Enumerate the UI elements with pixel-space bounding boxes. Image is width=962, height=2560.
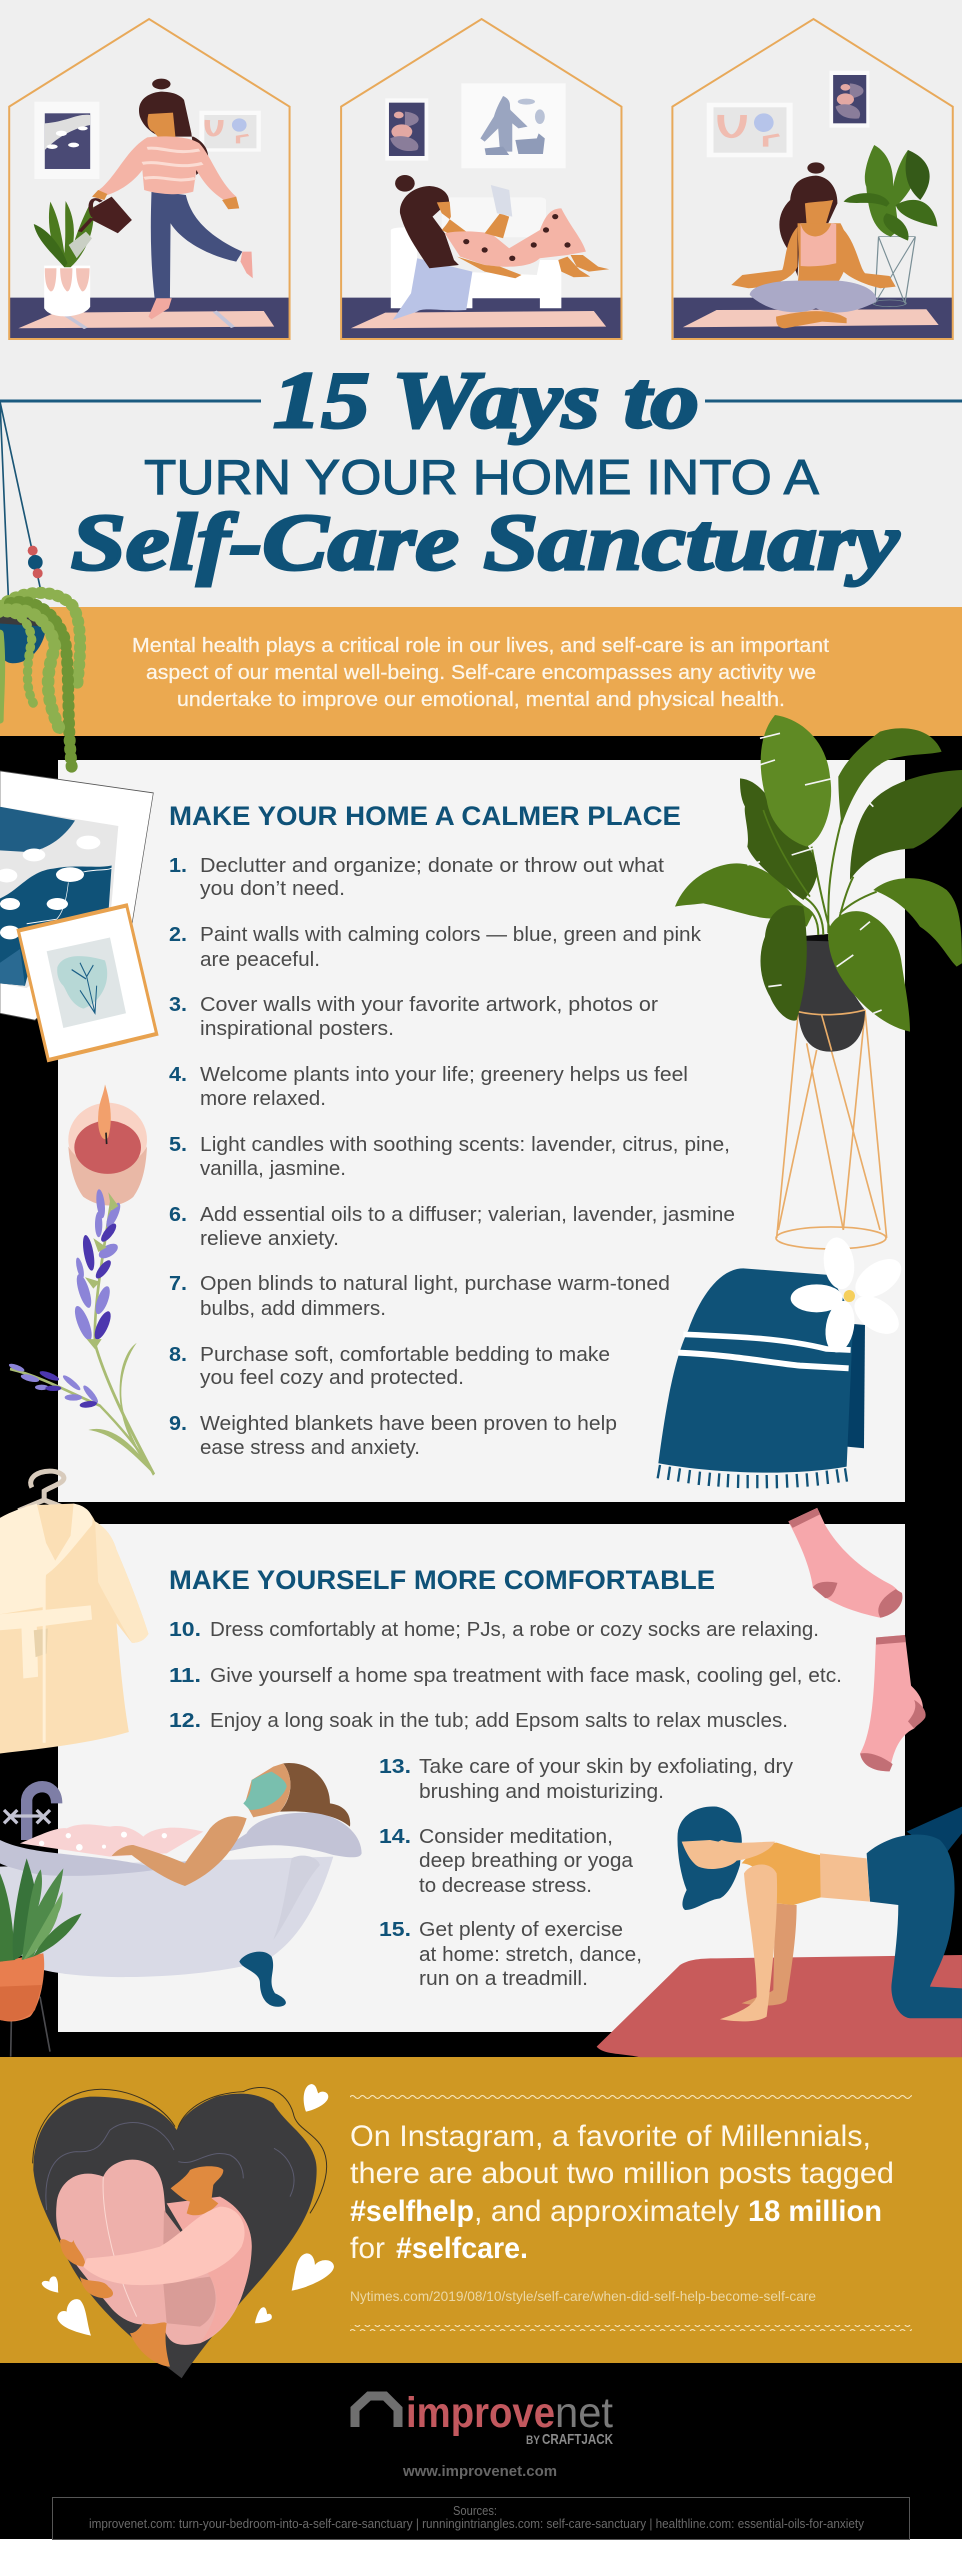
list item 4: Welcome plants into your life; greenery helps us feel: [200, 1063, 688, 1086]
list item 3: 3.: [169, 993, 187, 1016]
list item 14: 14.: [379, 1825, 411, 1848]
illustration: pink socks: [788, 1508, 926, 1771]
sources box: Sources:: [453, 2504, 497, 2518]
list item 14: to decrease stress.: [419, 1874, 592, 1897]
illustration: banana plant in stand: [675, 715, 962, 1249]
list item 3: Cover walls with your favorite artwork, photos or: [200, 993, 658, 1016]
list item 9: [169, 1412, 617, 1459]
sources box: [52, 2498, 910, 2540]
list item 13: 13.: [379, 1755, 411, 1778]
plant stand: [776, 1010, 887, 1249]
list item 2: [169, 923, 702, 971]
list item 15: 15.: [379, 1918, 411, 1941]
house 1: woman watering plant: [9, 79, 290, 339]
stat text: #selfhelp: [350, 2195, 474, 2228]
list item 1: [169, 854, 664, 900]
logo: improvenet by craftjack: improve: [406, 2389, 555, 2437]
logo: improvenet by craftjack: [355, 2389, 613, 2448]
illustration: candle: [68, 1084, 147, 1205]
list item 15: [379, 1918, 642, 1990]
stat text: On Instagram, a favorite of Millennials,: [350, 2120, 871, 2153]
sources box: improvenet.com: turn-your-bedroom-into-a-self-care-sanctuary | runningintriangles.com: self-care-sanctuary | healthline.com: essential-oils-for-anxiety: [89, 2517, 865, 2531]
list item 1: 1.: [169, 854, 187, 877]
title block: [0, 357, 962, 587]
logo: improvenet by craftjack: BY: [526, 2433, 540, 2447]
list item 15: at home: stretch, dance,: [419, 1943, 642, 1966]
house 2: woman reading on sofa: [341, 83, 621, 339]
illustration: framed art: [0, 771, 157, 1060]
list item 6: [169, 1203, 735, 1250]
list item 6: 6.: [169, 1203, 187, 1226]
list item 8: Purchase soft, comfortable bedding to make: [200, 1343, 610, 1366]
list item 10: 10.: [169, 1618, 201, 1641]
list item 5: [169, 1133, 730, 1180]
illustration: woman in bathtub: [0, 1763, 362, 2007]
list item 1: you don’t need.: [200, 877, 345, 900]
title block: Self-Care Sanctuary: [71, 499, 900, 587]
stat text: , and approximately: [474, 2195, 739, 2228]
list item 9: 9.: [169, 1412, 187, 1435]
logo: improvenet by craftjack: CRAFTJACK: [542, 2431, 613, 2448]
list item 12: 12.: [169, 1709, 201, 1732]
title block: TURN YOUR HOME INTO A: [144, 451, 819, 505]
list item 1: Declutter and organize; donate or throw out what: [200, 854, 664, 877]
list item 3: [169, 993, 658, 1040]
list item 13: [379, 1755, 794, 1803]
small orange frame: [18, 905, 157, 1060]
list item 6: relieve anxiety.: [200, 1227, 339, 1250]
section 1: heading: MAKE YOUR HOME A CALMER PLACE: [169, 801, 681, 831]
website url: www.improvenet.com: [402, 2464, 557, 2480]
logo: improvenet by craftjack: net: [555, 2389, 613, 2437]
list item 14: [379, 1825, 634, 1897]
list item 5: vanilla, jasmine.: [200, 1157, 346, 1180]
list item 13: brushing and moisturizing.: [419, 1780, 664, 1803]
stat text: [350, 2120, 894, 2265]
orange intro band: undertake to improve our emotional, mental and physical health.: [177, 689, 785, 711]
list item 14: Consider meditation,: [419, 1825, 613, 1848]
stat text: #selfcare.: [396, 2232, 528, 2265]
orange intro band: Mental health plays a critical role in our lives, and self-care is an important: [132, 635, 829, 657]
list item 7: [169, 1272, 670, 1320]
list item 4: 4.: [169, 1063, 187, 1086]
panel: comfortable background: [58, 1524, 905, 2032]
illustration: bathrobe on hanger: [0, 1471, 148, 1753]
stat: wavy rule top: [350, 2093, 912, 2099]
illustration: lavender sprigs: [8, 1188, 154, 1475]
list item 4: [169, 1063, 688, 1110]
band: gold stat panel: [0, 2057, 962, 2363]
illustration: woman hugging knees in heart: [33, 2084, 334, 2378]
panel: calmer place background: [58, 760, 905, 1502]
illustration: hanging plant: [0, 402, 80, 767]
list item 7: bulbs, add dimmers.: [200, 1297, 386, 1320]
illustration: blue blanket and flower: [658, 1235, 908, 1488]
list item 3: inspirational posters.: [200, 1017, 394, 1040]
list item 15: Get plenty of exercise: [419, 1918, 623, 1941]
list item 5: Light candles with soothing scents: lavender, citrus, pine,: [200, 1133, 730, 1156]
list item 7: 7.: [169, 1272, 187, 1295]
stat text: there are about two million posts tagged: [350, 2157, 894, 2190]
list item 8: [169, 1343, 610, 1389]
list item 2: 2.: [169, 923, 187, 946]
list item 9: ease stress and anxiety.: [200, 1436, 420, 1459]
list item 4: more relaxed.: [200, 1087, 326, 1110]
list item 8: 8.: [169, 1343, 187, 1366]
list item 9: Weighted blankets have been proven to help: [200, 1412, 617, 1435]
title block: 15 Ways to: [273, 357, 699, 445]
list item 10: Dress comfortably at home; PJs, a robe or cozy socks are relaxing.: [210, 1618, 819, 1641]
small white hearts: [42, 2084, 334, 2336]
list item 11: Give yourself a home spa treatment with face mask, cooling gel, etc.: [210, 1664, 842, 1687]
list item 7: Open blinds to natural light, purchase warm-toned: [200, 1272, 670, 1295]
list item 2: Paint walls with calming colors — blue, green and pink: [200, 923, 702, 946]
list item 14: deep breathing or yoga: [419, 1849, 634, 1872]
stat source: Nytimes.com/2019/08/10/style/self-care/when-did-self-help-become-self-care: [350, 2288, 816, 2304]
list item 8: you feel cozy and protected.: [200, 1366, 464, 1389]
section 2: heading: MAKE YOURSELF MORE COMFORTABLE: [169, 1565, 715, 1595]
list item 12: Enjoy a long soak in the tub; add Epsom salts to relax muscles.: [210, 1709, 788, 1732]
house 3: woman meditating: [674, 71, 953, 339]
illustration: potted plant on stand: [0, 1858, 82, 2057]
illustration row: three houses: [9, 19, 953, 339]
illustration: woman on yoga mat: [597, 1806, 962, 2057]
house outlines: [9, 19, 953, 339]
list item 6: Add essential oils to a diffuser; valerian, lavender, jasmine: [200, 1203, 735, 1226]
stat text: 18 million: [748, 2195, 882, 2228]
list item 13: Take care of your skin by exfoliating, dry: [419, 1755, 794, 1778]
stat text: for: [350, 2232, 385, 2265]
stat: wavy rule bottom: [350, 2325, 912, 2331]
list item 5: 5.: [169, 1133, 187, 1156]
orange intro band: aspect of our mental well-being. Self-care encompasses any activity we: [146, 662, 816, 684]
list item 11: 11.: [169, 1664, 201, 1687]
list item 15: run on a treadmill.: [419, 1967, 588, 1990]
list item 2: are peaceful.: [200, 948, 320, 971]
orange intro band: [0, 607, 962, 736]
